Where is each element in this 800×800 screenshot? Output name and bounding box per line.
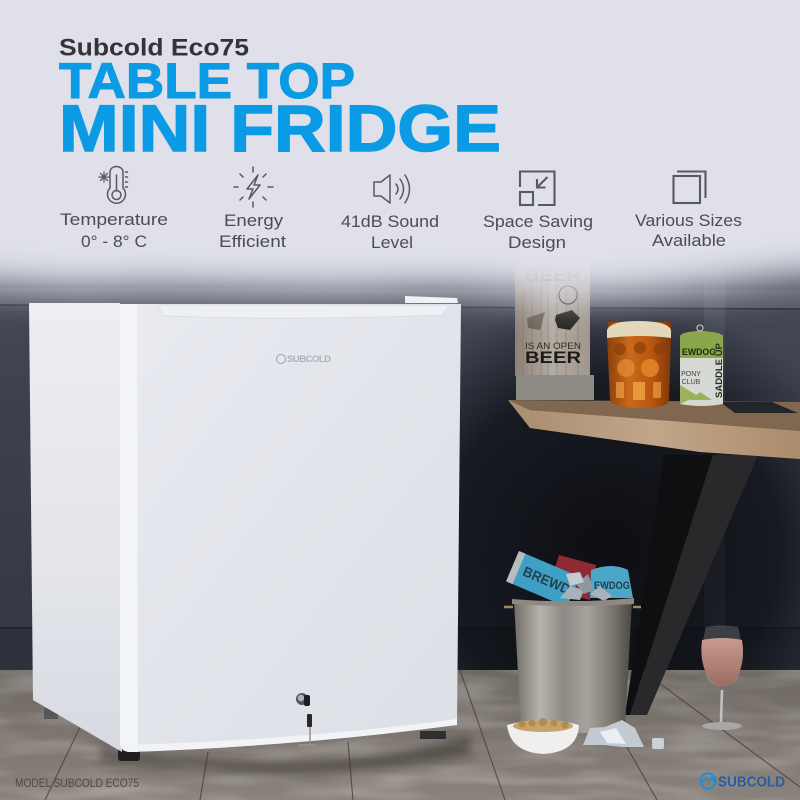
title line 1: TABLE TOP [59,53,355,109]
ice cubes on floor [583,720,664,749]
coaster [720,402,798,413]
wall sign: is an open beer: IS AN OPEN [525,341,581,352]
feature: sizes [635,172,742,250]
bucket contents: cans and ice: EWDOG [594,580,630,592]
hinge cover [405,296,458,303]
title line 2: MINI FRIDGE [59,91,501,165]
beer can: brewdog [680,325,725,406]
door handle recess [157,305,449,318]
label: 41dB Sound [341,213,439,231]
feature: sound [341,175,439,252]
beer can: brewdog: SADDLE UP [714,342,725,398]
label line 2: Efficient [219,233,286,251]
ice in bucket [560,572,612,601]
feature: space saving [483,172,593,252]
table: wooden top and metal leg [508,400,800,715]
ice bucket [504,598,641,733]
blue can right [590,566,633,598]
floor: wooden planks [0,670,800,800]
icon: stacked squares [674,172,706,203]
beer can: brewdog: CLUB [682,379,701,386]
value: 0° - 8° C [81,233,147,251]
blue can left: BREWD [521,563,573,597]
fridge door [120,304,461,752]
wall sign: is an open beer [515,235,594,400]
brand mark on door: SUBCOLD [287,354,331,365]
label line 2: Available [652,232,726,250]
fridge [29,296,461,761]
feature: energy [219,167,286,251]
icon: thermometer [99,166,128,203]
door bottom trim [125,719,457,752]
wall sign: is an open beer: BEER [525,266,581,285]
brand logo: SUBCOLD [718,774,785,790]
model caption: MODEL SUBCOLD ECO75 [15,776,139,790]
icon: speaker [374,175,410,203]
label line 2: Level [371,234,413,252]
lock and key [296,693,316,745]
bucket contents: cans and ice [506,551,633,607]
beer can: brewdog: EWDOG [682,347,716,358]
fridge feet [44,708,446,761]
brand heading: Subcold Eco75 [59,34,249,62]
wall sign: is an open beer: BEER [525,348,581,367]
bowl of nuts [507,718,579,754]
label: Energy [224,212,284,230]
table leg [625,455,758,715]
label: Temperature [60,211,168,229]
icon: lightning with rays [234,167,273,207]
beer can: brewdog: PONY [681,371,701,378]
wine glass [701,626,743,730]
header fade into wall [0,0,800,297]
red can [548,555,596,600]
table top [508,400,800,431]
door edge highlight [120,304,138,752]
fridge side panel [29,303,122,752]
label line 2: Design [508,234,566,252]
icon: compress square [520,172,554,205]
label: Space Saving [483,213,593,231]
feature: temperature [60,166,168,251]
label: Various Sizes [635,212,742,230]
beer mug [607,321,671,408]
